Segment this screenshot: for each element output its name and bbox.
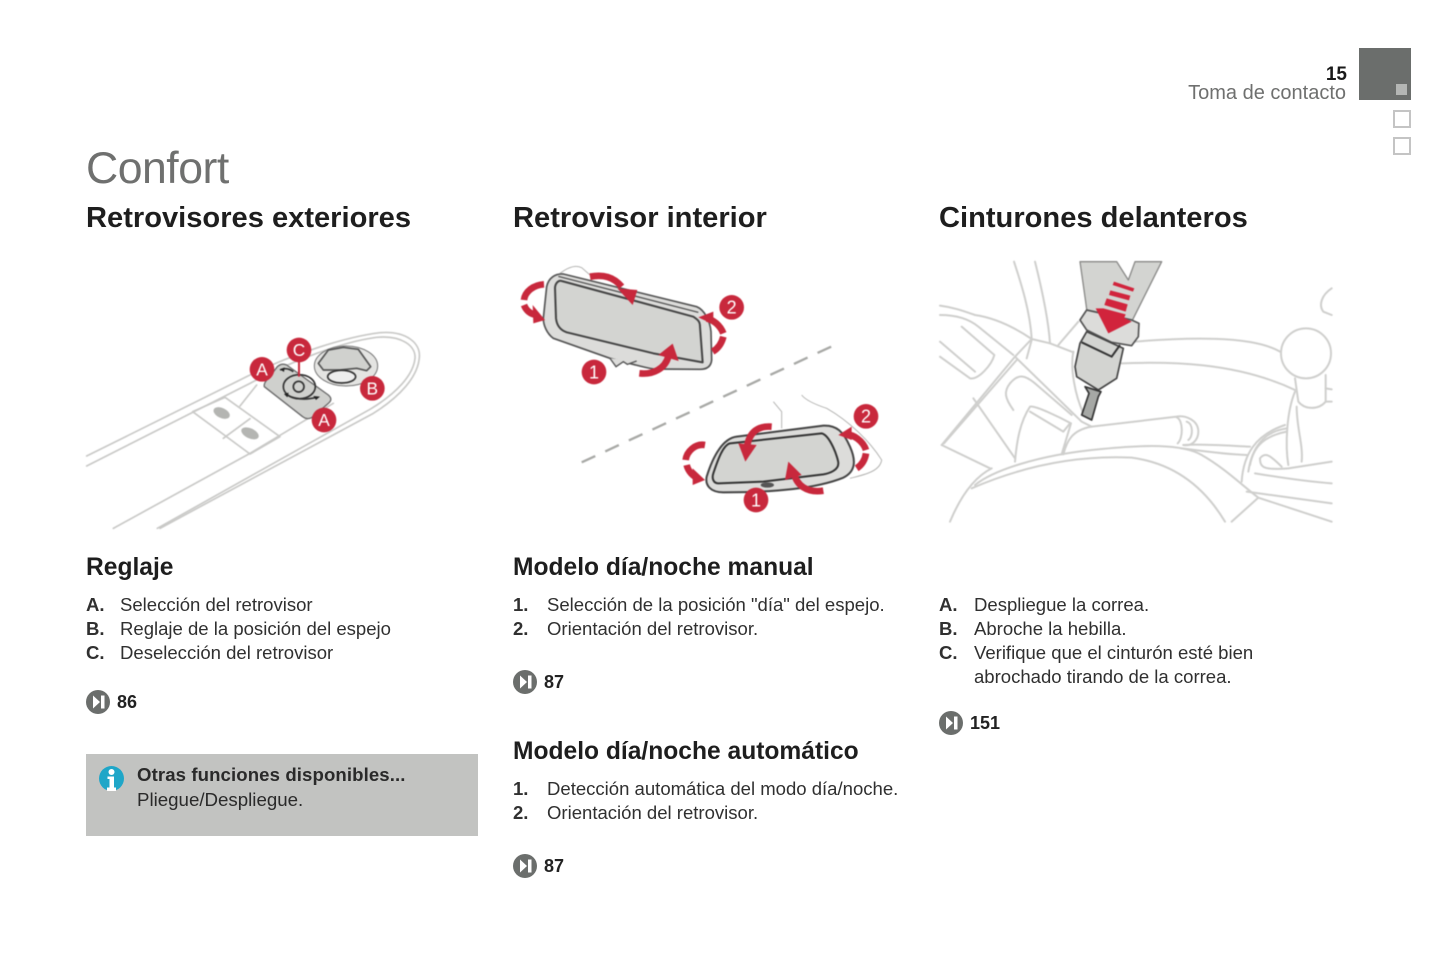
marker B: B [367, 378, 378, 398]
illustration: interior mirror adjustment [520, 265, 882, 514]
marker A bottom [312, 408, 336, 432]
list: automatic steps: 2. [513, 802, 528, 822]
list: seat belt steps: Verifique que el cinturón esté bien [974, 642, 1253, 662]
list: automatic steps: Orientación del retrovisor. [547, 802, 758, 822]
illustration: seat belt buckle [938, 260, 1333, 523]
list: automatic steps: 1. [513, 778, 528, 798]
list: seat belt steps: B. [939, 618, 958, 638]
subheading: manual day/night: Modelo día/noche manual [513, 554, 814, 581]
list: manual steps [513, 594, 885, 638]
list: adjustment steps: Reglaje de la posición del espejo [120, 618, 391, 638]
list: manual steps: Selección de la posición "día" del espejo. [547, 594, 885, 614]
list: adjustment steps [86, 594, 391, 662]
illustration: door mirror controls [86, 331, 421, 530]
marker 2 lower: 2 [861, 407, 871, 427]
list: seat belt steps: abrochado tirando de la correa. [974, 666, 1232, 686]
inactive tab 1 [1393, 110, 1411, 128]
list: manual steps: 2. [513, 618, 528, 638]
list: automatic steps [513, 778, 898, 822]
heading: front seat belts: Cinturones delanteros [939, 202, 1248, 234]
info text: Pliegue/Despliegue. [137, 789, 303, 810]
active tab [1359, 48, 1411, 100]
list: adjustment steps: B. [86, 618, 105, 638]
marker C: C [293, 340, 305, 360]
belt strap [1080, 262, 1162, 322]
inactive tab 2 [1393, 137, 1411, 155]
list: automatic steps: Detección automática del modo día/noche. [547, 778, 898, 798]
lower mirror [706, 426, 854, 492]
list: seat belt steps: Despliegue la correa. [974, 594, 1149, 614]
list: seat belt steps [939, 594, 1253, 686]
chapter navigation tabs [1359, 48, 1411, 155]
marker 2 upper: 2 [727, 298, 737, 318]
marker A top [250, 357, 274, 382]
title: Confort [86, 144, 229, 193]
info text: Otras funciones disponibles... [137, 764, 406, 785]
marker 1 upper: 1 [589, 362, 599, 382]
divider dashed line [582, 343, 838, 462]
info box [86, 754, 478, 836]
marker 1 lower: 1 [751, 490, 761, 510]
marker B [360, 376, 385, 401]
list: manual steps: 1. [513, 594, 528, 614]
marker A top: A [256, 359, 268, 379]
page reference 87: 87 [544, 672, 564, 692]
subheading: adjustment: Reglaje [86, 554, 173, 581]
window switches [212, 405, 261, 442]
red arrow [1096, 282, 1134, 333]
heading: exterior mirrors: Retrovisores exteriores [86, 202, 411, 234]
page reference 151 [939, 711, 1000, 735]
info text [137, 764, 406, 810]
page reference 87 second: 87 [544, 856, 564, 876]
page number: 15 [1326, 64, 1347, 85]
chapter label: Toma de contacto [1188, 82, 1346, 104]
list: seat belt steps: Abroche la hebilla. [974, 618, 1126, 638]
buckle [1080, 310, 1139, 346]
marker C stem [296, 350, 302, 377]
marker A bottom: A [318, 410, 330, 430]
list: adjustment steps: Selección del retrovisor [120, 594, 313, 614]
subheading: automatic day/night: Modelo día/noche automático [513, 738, 859, 765]
marker 1 lower [744, 488, 768, 512]
page reference 86 [86, 690, 137, 714]
list: seat belt steps: A. [939, 594, 958, 614]
upper mirror [543, 274, 712, 369]
page reference 87 [513, 670, 564, 694]
list: seat belt steps: C. [939, 642, 958, 662]
marker 2 upper [719, 295, 744, 320]
list: adjustment steps: A. [86, 594, 105, 614]
page reference 151: 151 [970, 713, 1000, 733]
page reference 86: 86 [117, 692, 137, 712]
page reference 87 second [513, 854, 564, 878]
selector panel [264, 364, 331, 419]
marker C [287, 338, 311, 362]
list: adjustment steps: Deselección del retrovisor [120, 642, 333, 662]
red rotation arrows [524, 276, 866, 491]
marker 1 upper [582, 360, 606, 384]
heading: interior mirror: Retrovisor interior [513, 202, 767, 234]
adjustment dial [314, 346, 378, 386]
list: manual steps: Orientación del retrovisor. [547, 618, 758, 638]
list: adjustment steps: C. [86, 642, 105, 662]
icon: info [99, 766, 124, 791]
marker 2 lower [854, 404, 878, 429]
